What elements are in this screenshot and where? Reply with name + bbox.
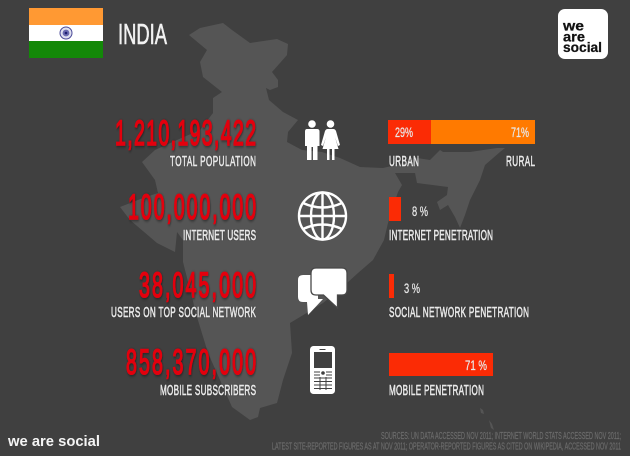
bar: urban and rural: 71% xyxy=(511,124,529,140)
logo: we are social: we xyxy=(562,18,584,34)
stat: mobile subscribers: MOBILE SUBSCRIBERS xyxy=(160,383,256,399)
stat: internet users: 100,000,000 xyxy=(128,188,256,228)
stat: total population: TOTAL POPULATION xyxy=(170,154,256,170)
bar: urban and rural xyxy=(388,120,535,170)
stat: mobile subscribers: 858,370,000 xyxy=(126,343,256,383)
stat: total population: 1,210,193,422 xyxy=(115,114,256,154)
bar: urban and rural: URBAN xyxy=(389,154,419,170)
bar: internet penetration xyxy=(389,197,493,244)
logo: we are social xyxy=(558,9,608,59)
map of India xyxy=(120,23,505,420)
stat: users on top social network: 38,045,000 xyxy=(139,266,256,306)
logo: we are social: social xyxy=(563,39,602,55)
stat: internet users: INTERNET USERS xyxy=(183,228,256,244)
footer brand: we are social xyxy=(7,433,100,450)
bar: social network penetration xyxy=(389,274,529,321)
icon: man and woman xyxy=(305,120,340,160)
bar: mobile penetration: 71 % xyxy=(465,357,487,373)
bar: urban and rural: 29% xyxy=(395,124,413,140)
flag of India xyxy=(29,8,103,58)
bar: internet penetration: INTERNET PENETRATION xyxy=(389,228,493,244)
title: INDIA xyxy=(118,19,167,51)
logo: we are social: are xyxy=(563,28,585,44)
bar: social network penetration: SOCIAL NETWORK PENETRATION xyxy=(389,305,529,321)
bar: social network penetration: 3 % xyxy=(404,280,420,296)
icon: mobile phone xyxy=(310,346,335,394)
Andaman islands xyxy=(480,408,494,430)
icon: speech bubbles xyxy=(298,268,347,315)
bar: mobile penetration: MOBILE PENETRATION xyxy=(389,383,484,399)
icon: globe xyxy=(299,192,346,240)
sources xyxy=(272,431,621,452)
bar: mobile penetration xyxy=(389,353,493,399)
stat: users on top social network xyxy=(111,266,256,321)
bar: urban and rural: RURAL xyxy=(506,154,535,170)
bar: internet penetration: 8 % xyxy=(412,203,428,219)
stat: users on top social network: USERS ON TOP SOCIAL NETWORK xyxy=(111,305,256,321)
